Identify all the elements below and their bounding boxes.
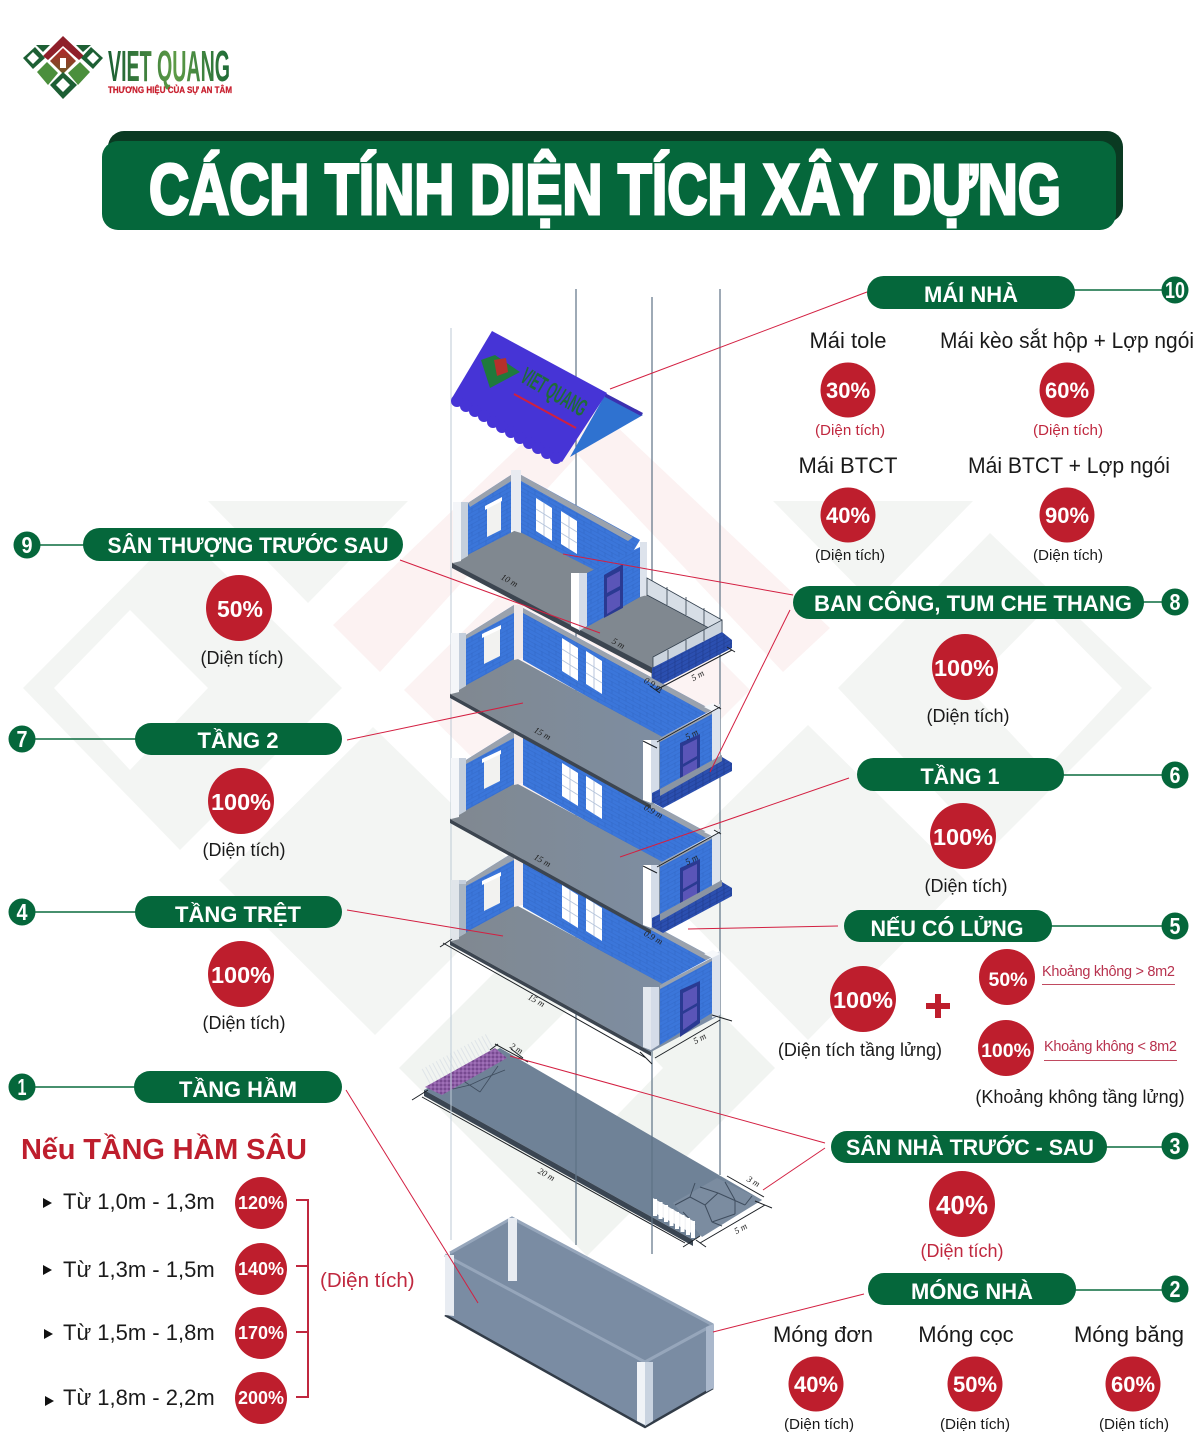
- ground floor value: [202, 941, 286, 1033]
- terrace floor model: 0.9 m: [642, 675, 665, 694]
- panel: yard: [831, 1131, 1188, 1261]
- foundation option: pile: 50%: [953, 1372, 997, 1397]
- ground floor model: [450, 852, 720, 1056]
- panel: mezzanine: [778, 910, 1188, 1107]
- vertical guide lines: [451, 289, 720, 1254]
- roof option: tole: Mái tole: [809, 328, 887, 353]
- depth row 1: [43, 1177, 287, 1229]
- yard heading: SÂN NHÀ TRƯỚC - SAU: [846, 1135, 1094, 1160]
- panel: basement: [8, 1071, 415, 1424]
- panel: second floor: [8, 723, 342, 860]
- void caption: (Khoảng không tầng lửng): [975, 1087, 1185, 1107]
- basement number: 1: [18, 1074, 27, 1100]
- roof option: concrete: [798, 453, 898, 564]
- yard: front and back: 5 m: [732, 1221, 749, 1236]
- depth row 1: 120%: [238, 1193, 284, 1213]
- first floor value: 100%: [933, 824, 993, 850]
- floor dimension labels: [440, 705, 732, 1064]
- depth row 2: 140%: [238, 1259, 284, 1279]
- terrace number: [14, 532, 90, 558]
- floor dimension labels: 15 m: [532, 852, 553, 869]
- depth row 3: 170%: [238, 1323, 284, 1343]
- first floor number: 6: [1170, 762, 1180, 788]
- second floor number: 7: [16, 726, 28, 752]
- background watermark: [23, 390, 1152, 1256]
- roof option: steel truss: [940, 328, 1194, 439]
- panel: roof: [798, 276, 1194, 564]
- second floor value: [202, 768, 286, 860]
- second floor heading: TẦNG 2: [198, 728, 278, 753]
- foundation option: single: [773, 1322, 873, 1433]
- roof option: concrete: (Diện tích): [815, 547, 885, 564]
- roof option: tole: [809, 328, 887, 439]
- ground floor number: 4: [16, 899, 28, 925]
- void above 8m2: Khoảng không > 8m2: [1042, 964, 1175, 980]
- foundation option: single: 40%: [794, 1372, 838, 1397]
- roof option: concrete with tile: (Diện tích): [1033, 547, 1103, 564]
- first floor heading: TẦNG 1: [920, 764, 1000, 789]
- void above 8m2: 50%: [988, 969, 1028, 991]
- foundation option: pile: (Diện tích): [940, 1416, 1010, 1433]
- depth row 4: Từ 1,8m - 2,2m: [63, 1385, 215, 1410]
- bracket label: (Diện tích): [320, 1269, 415, 1292]
- terrace floor model: 5 m: [689, 668, 706, 683]
- foundation option: strip: Móng băng: [1074, 1322, 1184, 1347]
- leader lines: [346, 292, 867, 1332]
- floor dimension labels: 5 m: [691, 1031, 708, 1046]
- terrace number: 9: [22, 532, 32, 558]
- first floor model: [450, 730, 732, 934]
- terrace heading: [83, 528, 403, 561]
- logo icon: [23, 36, 103, 99]
- yard: front and back: 20 m: [536, 1166, 557, 1183]
- yard: front and back: 2 m: [508, 1041, 525, 1056]
- roof option: concrete with tile: Mái BTCT + Lợp ngói: [968, 453, 1170, 478]
- first floor heading: [857, 758, 1064, 791]
- roof option: steel truss: (Diện tích): [1033, 422, 1103, 439]
- terrace floor model: 5 m: [610, 636, 627, 651]
- ground floor value: (Diện tích): [202, 1013, 286, 1033]
- first floor value: [924, 803, 1008, 896]
- yard number: 3: [1170, 1133, 1180, 1159]
- second floor number: [8, 726, 140, 752]
- basement heading: TẦNG HẦM: [179, 1077, 297, 1102]
- foundation heading: MÓNG NHÀ: [911, 1279, 1033, 1304]
- foundation heading: [868, 1273, 1076, 1305]
- yard value: [920, 1171, 1004, 1261]
- roof option: tole: (Diện tích): [815, 422, 885, 439]
- second floor value: (Diện tích): [202, 840, 286, 860]
- foundation number: 2: [1170, 1276, 1180, 1302]
- floor dimension labels: 0.9 m: [642, 928, 665, 947]
- roof connector and number: [1070, 276, 1188, 304]
- yard number: [1100, 1132, 1188, 1160]
- balcony number: [1140, 588, 1188, 616]
- floor dimension labels: 0.9 m: [642, 802, 665, 821]
- foundation option: strip: (Diện tích): [1099, 1416, 1169, 1433]
- yard value: 40%: [936, 1190, 988, 1220]
- balcony value: 100%: [934, 655, 994, 681]
- ground floor heading: TẦNG TRỆT: [175, 902, 302, 927]
- terrace value: [200, 575, 284, 668]
- roof connector and number: 10: [1165, 277, 1185, 303]
- depth row 2: Từ 1,3m - 1,5m: [63, 1257, 215, 1282]
- second floor model: [450, 605, 732, 809]
- mezzanine number: 5: [1170, 913, 1181, 939]
- logo: [23, 36, 232, 99]
- floor dimension labels: 5 m: [683, 727, 700, 742]
- void above 8m2: [979, 949, 1175, 1005]
- depth row 3: Từ 1,5m - 1,8m: [63, 1320, 215, 1345]
- ground floor number: [8, 898, 140, 926]
- roof option: concrete with tile: [968, 453, 1170, 564]
- roof model: VIET QUANG: [516, 363, 592, 422]
- terrace value: 50%: [217, 596, 263, 622]
- mezzanine area value: (Diện tích tầng lửng): [778, 1040, 942, 1060]
- second floor value: 100%: [211, 789, 271, 815]
- mezzanine number: [1048, 912, 1188, 940]
- roof option: steel truss: 60%: [1045, 378, 1089, 403]
- mezzanine heading: [844, 910, 1052, 942]
- floor dimension labels: 5 m: [683, 852, 700, 867]
- roof heading: [867, 276, 1075, 309]
- foundation option: single: Móng đơn: [773, 1322, 873, 1347]
- roof option: tole: 30%: [826, 378, 870, 403]
- foundation option: single: (Diện tích): [784, 1416, 854, 1433]
- terrace value: (Diện tích): [200, 648, 284, 668]
- basement number: [8, 1074, 140, 1100]
- terrace floor model: [452, 470, 735, 694]
- void below 8m2: 100%: [981, 1040, 1031, 1062]
- first floor value: (Diện tích): [924, 876, 1008, 896]
- foundation number: [1070, 1276, 1188, 1302]
- yard value: (Diện tích): [920, 1241, 1004, 1261]
- foundation option: strip: [1074, 1322, 1184, 1433]
- depth row 4: [45, 1372, 287, 1424]
- panel: terrace: [14, 528, 403, 668]
- panel: ground floor: [8, 896, 342, 1033]
- balcony value: [926, 634, 1010, 726]
- void below 8m2: [978, 1020, 1177, 1076]
- roof option: concrete: Mái BTCT: [798, 453, 898, 478]
- mezzanine heading: NẾU CÓ LỬNG: [870, 916, 1024, 941]
- roof heading: MÁI NHÀ: [924, 282, 1018, 307]
- plus sign: [926, 994, 950, 1018]
- title banner: [102, 131, 1123, 230]
- mezzanine area value: [778, 966, 942, 1060]
- roof option: concrete with tile: 90%: [1045, 503, 1089, 528]
- terrace floor model: 10 m: [499, 572, 520, 589]
- deep basement heading: Nếu TẦNG HẦM SÂU: [21, 1132, 307, 1166]
- balcony value: (Diện tích): [926, 706, 1010, 726]
- foundation option: pile: Móng cọc: [918, 1322, 1014, 1347]
- depth row 2: [43, 1243, 287, 1295]
- floor dimension labels: 15 m: [532, 725, 553, 742]
- balcony number: 8: [1170, 589, 1181, 615]
- bracket: [296, 1200, 308, 1397]
- text: VIET QUANG: [108, 42, 230, 91]
- second floor heading: [135, 723, 342, 755]
- foundation option: strip: 60%: [1111, 1372, 1155, 1397]
- yard: front and back: [412, 1041, 772, 1247]
- mezzanine area value: 100%: [833, 987, 893, 1013]
- yard: front and back: 3 m: [744, 1173, 762, 1189]
- balcony heading: [793, 586, 1144, 619]
- panel: balcony: [793, 586, 1188, 726]
- first floor number: [1060, 762, 1188, 788]
- basement heading: [134, 1071, 342, 1103]
- terrace heading: SÂN THƯỢNG TRƯỚC SAU: [108, 533, 388, 558]
- ground floor value: 100%: [211, 962, 271, 988]
- logo tagline: THƯƠNG HIỆU CỦA SỰ AN TÂM: [108, 84, 232, 95]
- basement model: [445, 1218, 714, 1427]
- depth row 3: [44, 1307, 287, 1359]
- floor dimension labels: 15 m: [526, 992, 547, 1009]
- roof model: [451, 331, 643, 464]
- ground floor heading: [135, 896, 342, 928]
- depth row 4: 200%: [238, 1388, 284, 1408]
- void below 8m2: Khoảng không < 8m2: [1044, 1039, 1177, 1055]
- balcony heading: BAN CÔNG, TUM CHE THANG: [814, 591, 1132, 616]
- foundation option: pile: [918, 1322, 1014, 1433]
- depth row 1: Từ 1,0m - 1,3m: [63, 1189, 215, 1214]
- panel: foundation: [773, 1273, 1188, 1433]
- panel: first floor: [857, 758, 1188, 896]
- roof option: concrete: 40%: [826, 503, 870, 528]
- roof option: steel truss: Mái kèo sắt hộp + Lợp ngói: [940, 328, 1194, 353]
